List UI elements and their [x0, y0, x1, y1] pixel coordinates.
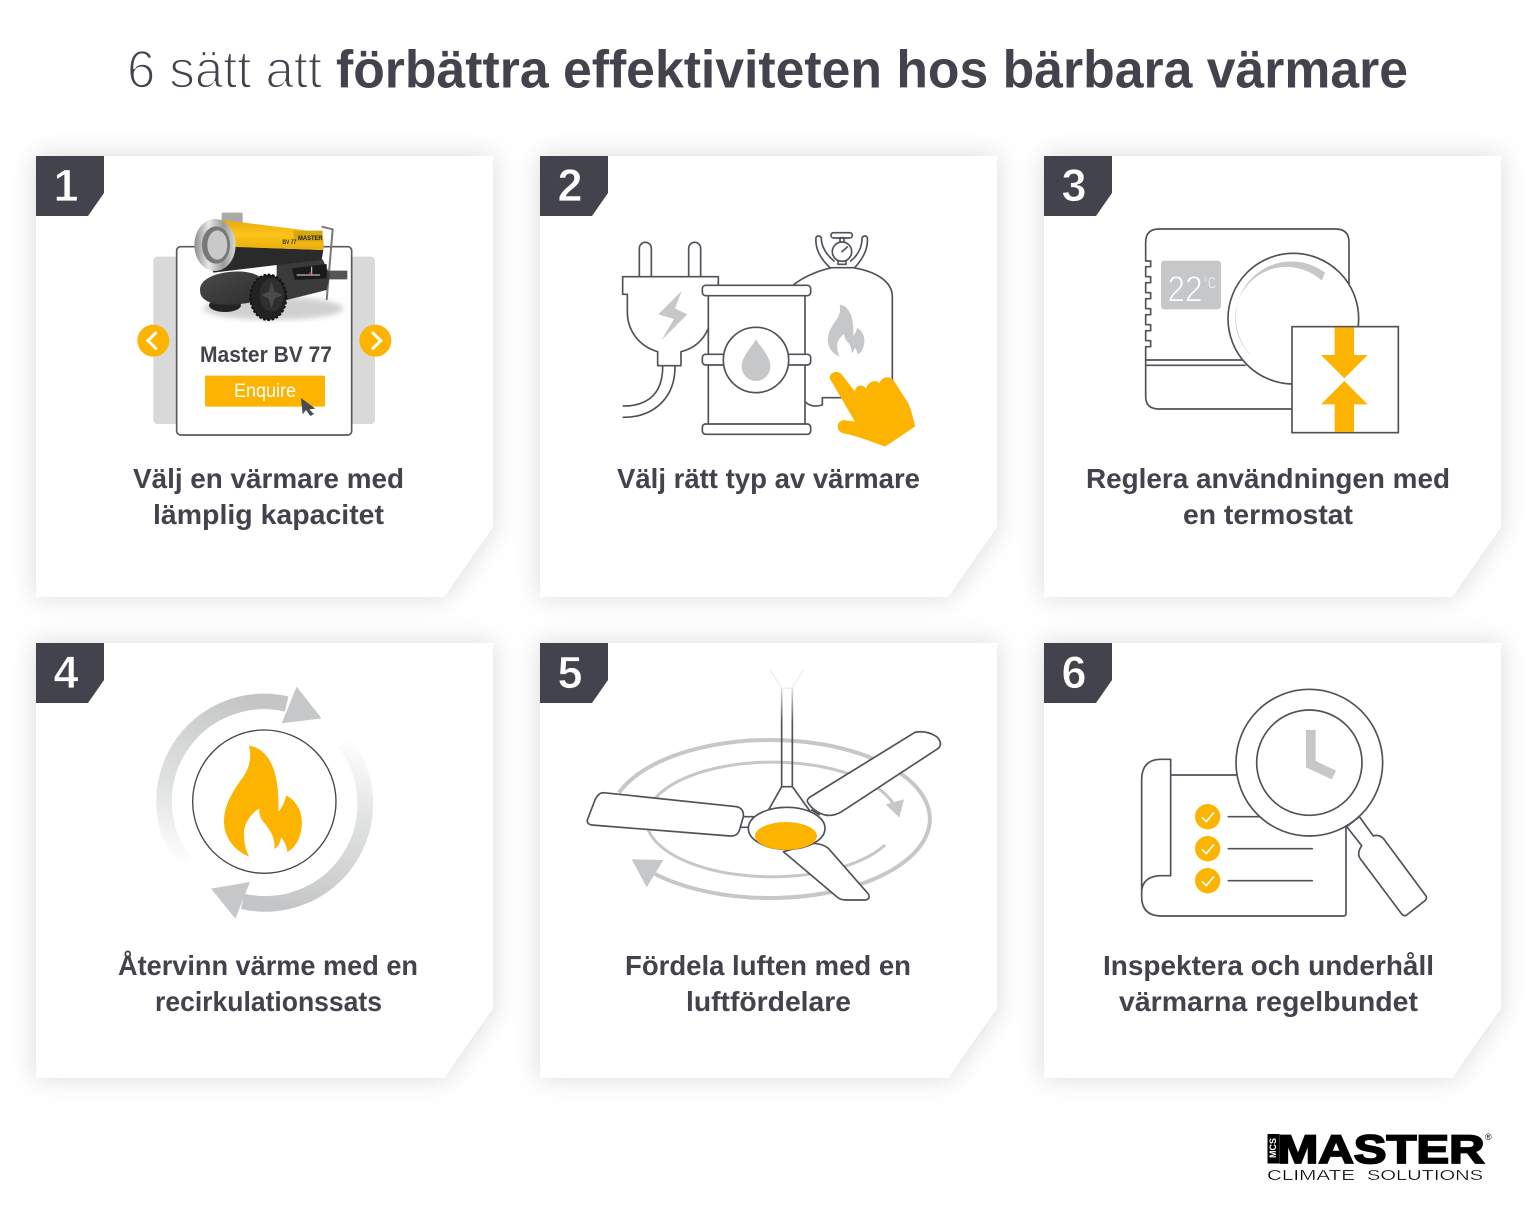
caption 1 — [133, 463, 404, 530]
caption 3: en termostat — [1183, 499, 1353, 530]
airflow arrows — [619, 740, 930, 898]
caption 5 — [625, 950, 911, 1017]
caption 1: Välj en värmare med — [133, 463, 404, 494]
icon: heater product card — [137, 213, 391, 435]
product name: Master BV 77 — [200, 342, 332, 367]
caption 4 — [118, 950, 418, 1017]
caption 3: Reglera användningen med — [1086, 463, 1450, 494]
icon: heater product card: BV 77 — [282, 239, 297, 246]
icon: heater product card: MASTER — [298, 235, 323, 242]
caption 1: lämplig kapacitet — [153, 499, 384, 530]
number badge 4: 4 — [53, 647, 79, 698]
caption 2: Välj rätt typ av värmare — [617, 463, 920, 494]
number badge 4 — [36, 643, 104, 703]
number badge 6: 6 — [1061, 647, 1087, 698]
icon: thermostat: 22 — [1167, 269, 1203, 310]
icon: thermostat — [1146, 229, 1398, 433]
icon: flame with circular arrows — [164, 687, 365, 919]
logo: Master Climate Solutions: SOLUTIONS — [1367, 1168, 1483, 1184]
number badge 5 — [540, 643, 608, 703]
hand pointer — [830, 372, 915, 447]
panel: step 1 choose capacity — [36, 156, 493, 597]
panel: step 4 recirculation — [36, 643, 493, 1078]
panel: step 2 choose heater type — [540, 156, 997, 597]
number badge 3 — [1044, 156, 1112, 216]
card background — [1044, 643, 1501, 1078]
icon: compress arrows — [1321, 327, 1368, 432]
number badge 5: 5 — [557, 647, 583, 698]
number badge 6 — [1044, 643, 1112, 703]
title: 6 sätt att — [127, 40, 322, 100]
logo: Master Climate Solutions: ® — [1485, 1132, 1492, 1142]
caption 3 — [1086, 463, 1450, 530]
logo: Master Climate Solutions: MASTER — [1278, 1128, 1485, 1172]
caption 6: Inspektera och underhåll — [1103, 950, 1434, 981]
caption 5: Fördela luften med en — [625, 950, 911, 981]
caption 4: recirkulationssats — [155, 986, 382, 1017]
fuel barrel — [702, 285, 811, 434]
caption 6 — [1103, 950, 1434, 1017]
icon: checklist with magnifier — [1142, 689, 1426, 916]
caption 5: luftfördelare — [686, 986, 851, 1017]
card background — [540, 156, 997, 597]
card background — [36, 643, 493, 1078]
panel: step 3 thermostat — [1044, 156, 1501, 597]
number badge 2: 2 — [557, 160, 583, 211]
recirculation arrows — [164, 687, 365, 919]
icon: plug, barrel, gas bottle and hand — [623, 233, 915, 447]
caption 4: Återvinn värme med en — [118, 950, 418, 981]
panel: step 6 inspection — [1044, 643, 1501, 1078]
card background — [1044, 156, 1501, 597]
number badge 2 — [540, 156, 608, 216]
logo: Master Climate Solutions: MCS — [1268, 1138, 1278, 1158]
button label: Enquire — [234, 381, 296, 402]
electric plug — [623, 242, 718, 417]
logo: Master Climate Solutions — [1267, 1128, 1492, 1184]
card background — [36, 156, 493, 597]
gas bottle — [793, 233, 892, 406]
caption 6: värmarna regelbundet — [1119, 986, 1418, 1017]
number badge 3: 3 — [1061, 160, 1087, 211]
checklist scroll — [1142, 759, 1346, 916]
number badge 1 — [36, 156, 104, 216]
magnifier with clock — [1236, 689, 1426, 916]
title: förbättra effektiviteten hos bärbara värmare — [336, 40, 1408, 100]
logo: Master Climate Solutions: CLIMATE — [1267, 1168, 1355, 1184]
icon: thermostat: °C — [1203, 273, 1216, 292]
icon: ceiling fan — [587, 670, 940, 900]
card background — [540, 643, 997, 1078]
panel: step 5 air distribution — [540, 643, 997, 1078]
number badge 1: 1 — [53, 160, 79, 211]
